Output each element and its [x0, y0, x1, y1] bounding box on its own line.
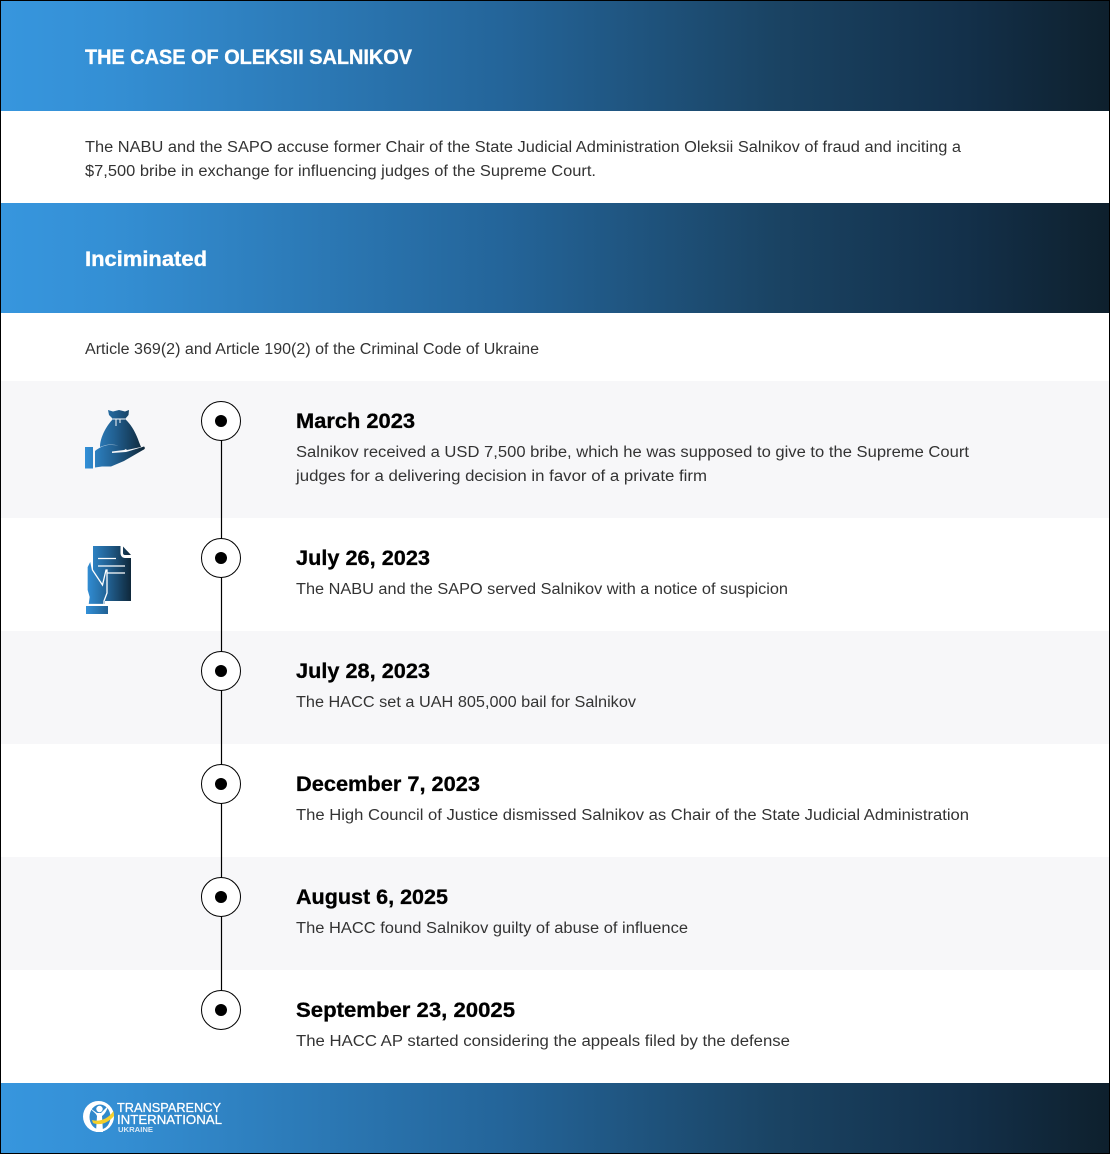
timeline entry: March 2023 [202, 402, 970, 485]
marker [202, 878, 240, 916]
date: July 26, 2023 [296, 547, 430, 570]
logo emblem [83, 1101, 114, 1132]
date: July 28, 2023 [296, 660, 430, 683]
icon: hand holding money bag [85, 410, 145, 468]
marker [202, 402, 240, 440]
timeline entry: September 23, 20025 [202, 990, 790, 1050]
logo wordmark: INTERNATIONAL [117, 1112, 222, 1127]
description: judges for a delivering decision in favor of a private firm [295, 468, 707, 485]
footer band [1, 1083, 1109, 1153]
description: The NABU and the SAPO served Salnikov with a notice of suspicion [296, 581, 788, 598]
date: December 7, 2023 [296, 773, 480, 796]
marker [202, 990, 240, 1030]
date: March 2023 [296, 410, 415, 433]
logo wordmark: TRANSPARENCY [117, 1100, 221, 1115]
header: title [1, 1, 1109, 111]
intro text [85, 139, 961, 180]
title: THE CASE OF OLEKSII SALNIKOV [85, 46, 412, 69]
logo wordmark [117, 1100, 222, 1134]
date: September 23, 20025 [296, 999, 515, 1022]
icon: hand holding document [86, 546, 131, 614]
intro text: The NABU and the SAPO accuse former Chair of the State Judicial Administration Oleksii Salnikov of fraud and inciting a [85, 139, 961, 156]
timeline entry: July 28, 2023 [202, 652, 636, 711]
description: The HACC found Salnikov guilty of abuse of influence [296, 920, 688, 937]
date: August 6, 2025 [296, 886, 448, 909]
marker [202, 764, 240, 804]
timeline entry: August 6, 2025 [202, 878, 688, 937]
description [295, 444, 970, 485]
description: The HACC set a UAH 805,000 bail for Salnikov [296, 694, 636, 711]
description: Salnikov received a USD 7,500 bribe, which he was supposed to give to the Supreme Court [296, 444, 970, 461]
logo wordmark: UKRAINE [118, 1127, 153, 1134]
marker [202, 652, 240, 690]
row backgrounds [1, 381, 1109, 970]
description: The High Council of Justice dismissed Salnikov as Chair of the State Judicial Administration [296, 807, 969, 824]
header: incriminated [1, 203, 1109, 313]
description: The HACC AP started considering the appeals filed by the defense [296, 1033, 790, 1050]
marker [202, 538, 240, 578]
articles text: Article 369(2) and Article 190(2) of the Criminal Code of Ukraine [85, 341, 539, 358]
logo: Transparency International Ukraine [83, 1100, 222, 1134]
timeline line [220, 421, 222, 1010]
section heading: Inciminated [85, 248, 207, 271]
timeline entry: December 7, 2023 [202, 764, 969, 824]
intro text: $7,500 bribe in exchange for influencing judges of the Supreme Court. [85, 163, 596, 180]
timeline entry: July 26, 2023 [202, 538, 788, 598]
